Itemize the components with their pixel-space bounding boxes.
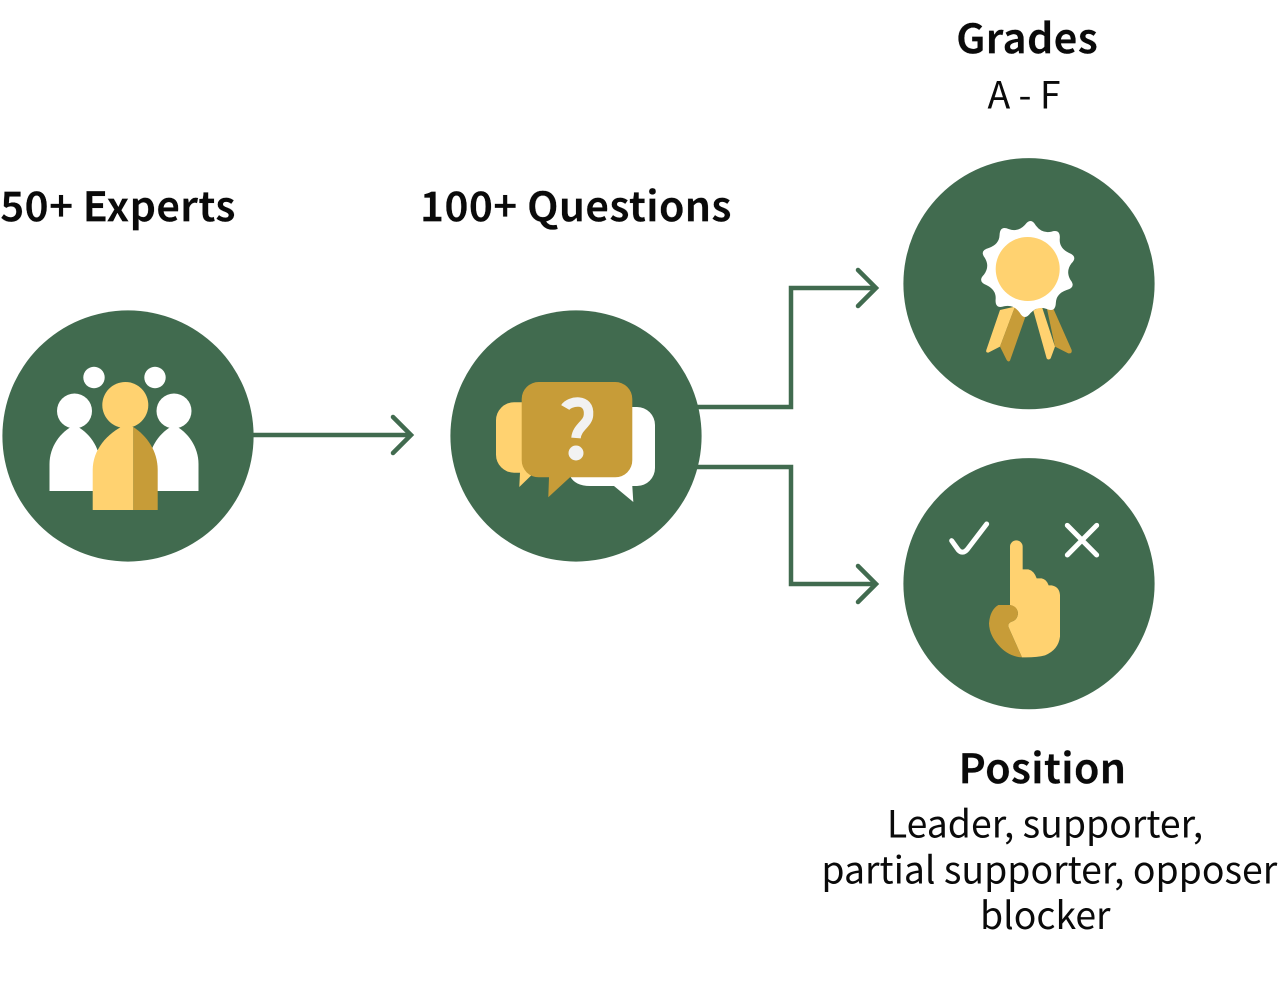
- text: position categories: Leader, supporter,: [887, 795, 1203, 849]
- icon: pointing hand with check and cross: [952, 524, 1097, 657]
- heading: Grades: Grades: [956, 6, 1098, 66]
- arrow: questions to position: [695, 467, 876, 602]
- circle: experts: [2, 310, 254, 562]
- arrow: questions to grades: [695, 270, 876, 407]
- icon: question speech bubbles: [496, 382, 655, 502]
- heading: 100+ Questions: 100+ Questions: [420, 174, 732, 234]
- circle: grades: [903, 158, 1155, 409]
- arrow: experts to questions: [250, 417, 411, 453]
- icon: group of people: [50, 367, 198, 510]
- icon: award rosette: [979, 218, 1076, 362]
- circle: position: [903, 458, 1155, 709]
- text: position categories: blocker: [980, 886, 1111, 940]
- text: position categories: partial supporter, opposer: [821, 840, 1278, 894]
- heading: Position: Position: [958, 736, 1126, 796]
- text: position categories: [821, 795, 1278, 940]
- heading: 50+ Experts: 50+ Experts: [0, 174, 236, 234]
- circle: questions: [450, 310, 702, 562]
- text: A - F: A - F: [987, 66, 1061, 120]
